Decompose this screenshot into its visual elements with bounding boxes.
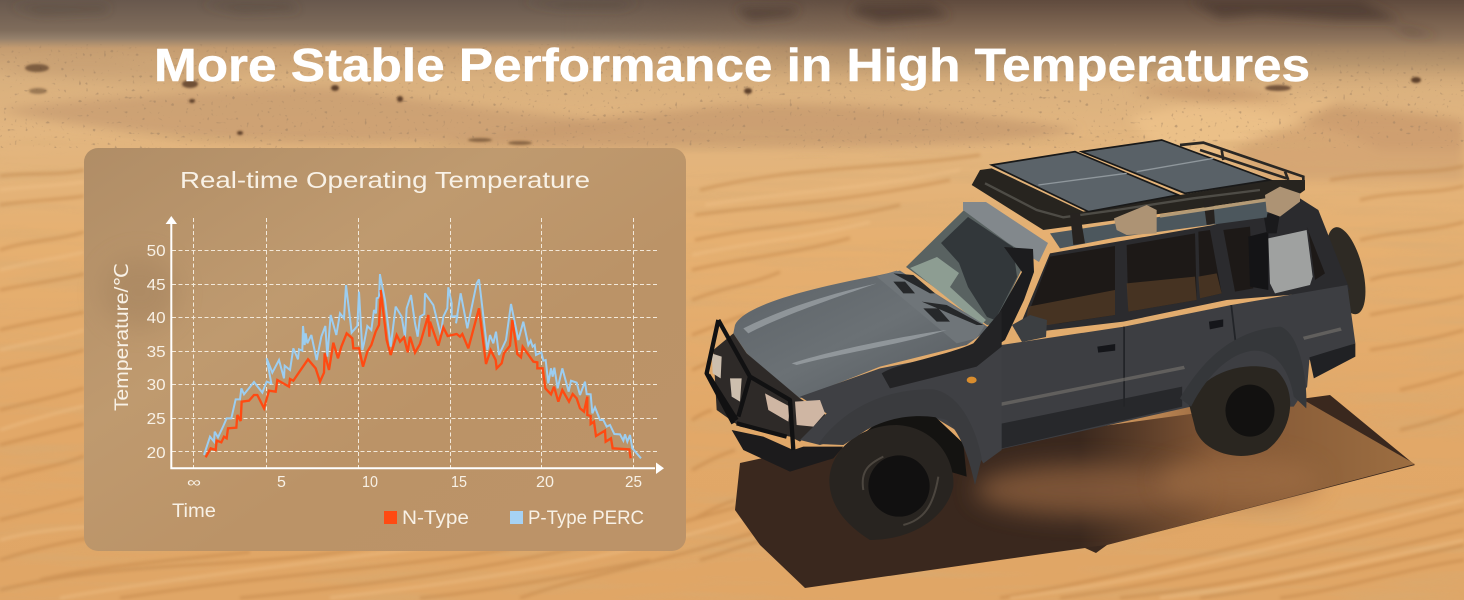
axes — [166, 216, 664, 474]
front section — [707, 271, 1002, 540]
cabin frame — [1017, 198, 1350, 333]
front bumper — [732, 430, 843, 472]
front wheel arch — [818, 389, 982, 485]
rear and roof section — [972, 140, 1373, 333]
wheel arch interior — [843, 415, 967, 477]
jerry can with mount — [1248, 213, 1313, 293]
x axis labels: ∞ — [187, 474, 201, 490]
snorkel head — [990, 247, 1034, 350]
bull bar — [707, 320, 793, 450]
hood highlights — [743, 283, 947, 365]
sand ripples texture — [0, 130, 1464, 600]
front fender — [800, 347, 1002, 463]
y axis labels: 45 — [147, 277, 166, 294]
mid-distance dunes — [0, 57, 1464, 180]
front wheel — [829, 425, 953, 540]
snorkel — [882, 310, 1002, 388]
window reflections — [1025, 273, 1222, 328]
series: P-Type PERC line — [204, 274, 641, 458]
door handles — [1097, 319, 1223, 353]
x axis labels: 15 — [451, 474, 467, 491]
side mirror — [1012, 315, 1047, 342]
rear wheel — [1189, 366, 1290, 456]
vehicle with rooftop solar panels — [707, 140, 1415, 588]
x axis labels: 25 — [625, 474, 642, 491]
legend: N-Type: N-Type — [402, 508, 469, 529]
grid lines — [172, 218, 659, 468]
y axis labels: 25 — [147, 411, 166, 428]
y axis labels: 30 — [147, 377, 166, 394]
legend — [384, 508, 644, 529]
headlight — [765, 393, 825, 427]
hood — [733, 271, 990, 398]
y axis labels: 40 — [147, 310, 166, 327]
lower body side — [963, 285, 1355, 463]
shovel handle — [1160, 199, 1270, 216]
distant mountains — [34, 0, 1464, 78]
sand ripple ridges — [0, 155, 1464, 598]
x axis labels — [187, 474, 642, 491]
legend: P-Type PERC: P-Type PERC — [528, 508, 644, 529]
title: More Stable Performance in High Temperatures — [154, 39, 1310, 91]
scattered rocks and specks — [0, 44, 1464, 148]
wiper vents — [893, 273, 983, 325]
shovel heads — [1114, 187, 1300, 235]
front face — [713, 333, 828, 442]
rear bumper — [1309, 343, 1355, 378]
x axis title: Time — [172, 501, 216, 522]
y axis labels: 35 — [147, 344, 166, 361]
sand ripple highlights — [0, 170, 1464, 598]
panel: real-time operating temperature chart — [84, 148, 686, 551]
side windows — [1023, 227, 1325, 327]
series: N-Type line — [206, 290, 631, 458]
solar panel right — [1082, 140, 1270, 193]
auxiliary lights — [712, 353, 742, 402]
y axis labels: 50 — [147, 243, 166, 260]
roof rack — [972, 143, 1305, 248]
vehicle ground shadow — [735, 395, 1415, 588]
spare wheel — [1319, 223, 1373, 318]
rear wheel arch — [1180, 327, 1307, 408]
y axis labels — [147, 243, 166, 462]
marker lamp — [967, 377, 977, 383]
windshield — [906, 210, 1033, 325]
A-pillar and roof edge — [963, 202, 1048, 262]
x axis labels: 10 — [362, 474, 378, 491]
panel heading: Real-time Operating Temperature — [180, 167, 590, 193]
x axis labels: 20 — [536, 474, 554, 491]
cowl — [877, 271, 985, 343]
y axis labels: 20 — [147, 445, 166, 462]
x axis labels: 5 — [277, 474, 286, 491]
y axis title: Temperature/℃ — [112, 263, 133, 411]
solar panel left — [992, 152, 1178, 212]
